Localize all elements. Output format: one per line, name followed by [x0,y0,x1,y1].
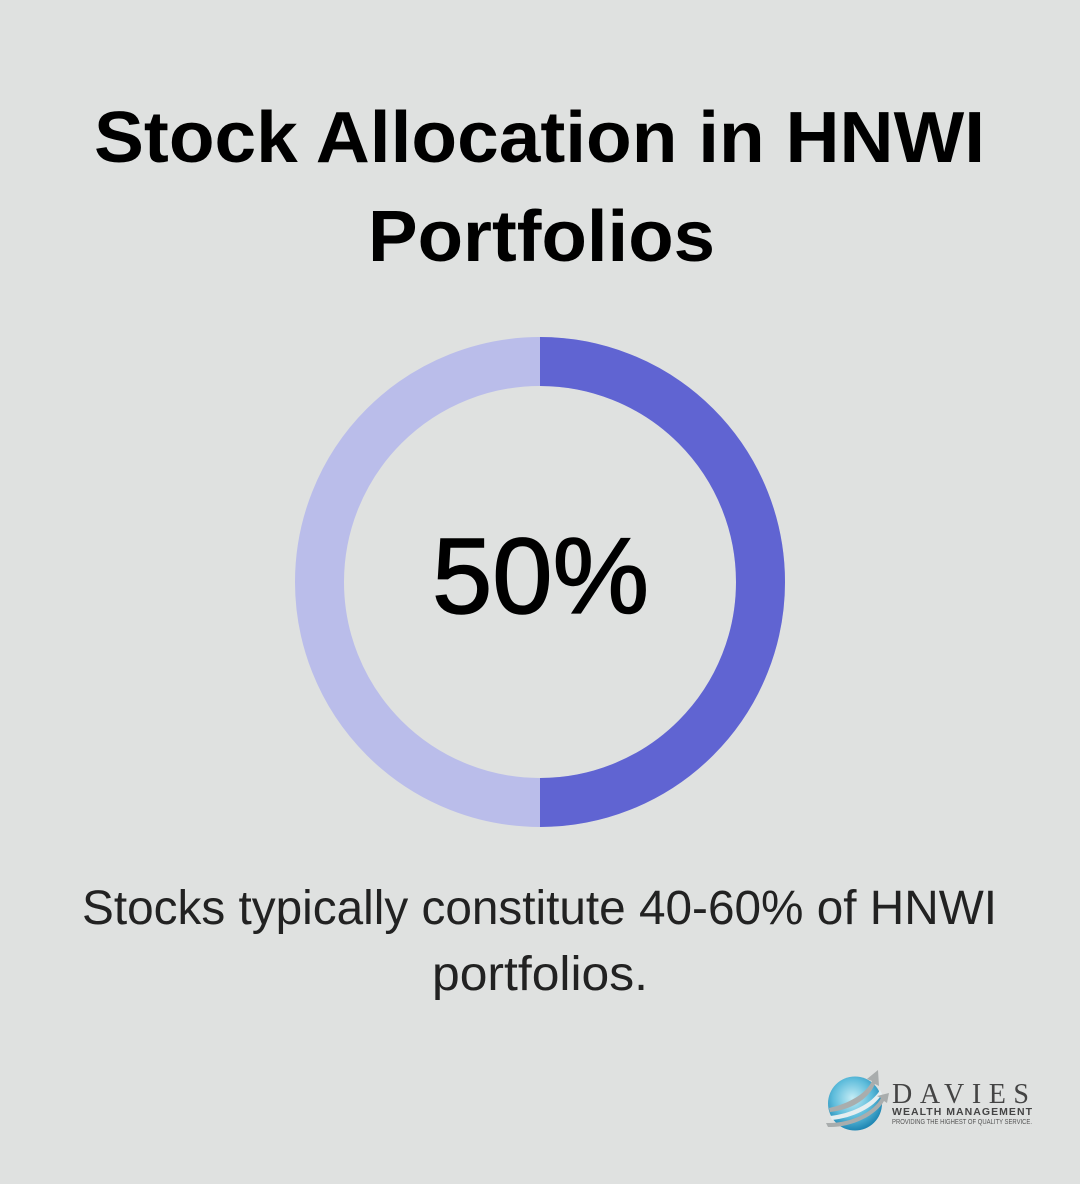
donut chart: 50% [320,362,760,802]
title [94,98,985,277]
title: Portfolios [368,197,715,277]
logo subtitle: WEALTH MANAGEMENT [892,1106,1033,1118]
logo wordmark: DAVIES [892,1079,1029,1110]
donut value arc [540,362,760,802]
title: Stock Allocation in HNWI [94,98,985,178]
description text: Stocks typically constitute 40-60% of HNWI [82,882,997,935]
description text [82,882,997,1001]
description text: portfolios. [432,948,648,1001]
center value: 50% [432,515,649,636]
donut track [320,362,760,802]
icon: globe with arrows [826,1070,889,1130]
logo: Davies Wealth Management [826,1070,1033,1130]
logo tagline: PROVIDING THE HIGHEST OF QUALITY SERVICE. [892,1119,1032,1126]
